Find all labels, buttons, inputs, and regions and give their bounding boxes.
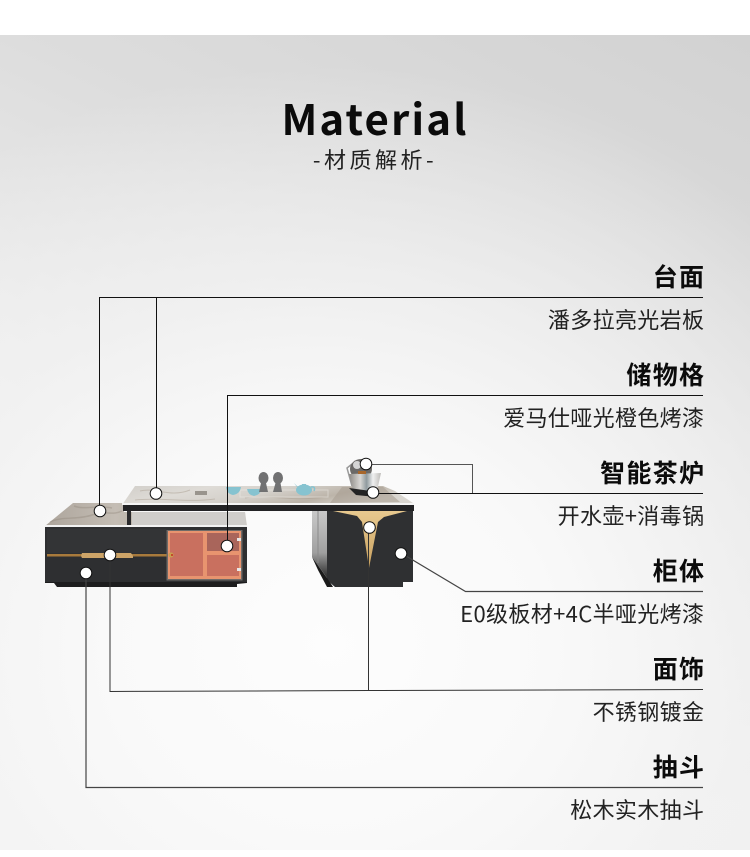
drawer gold strip	[47, 553, 167, 558]
marble veins and tray	[135, 490, 328, 500]
label: trim material: 不锈钢镀金	[593, 695, 704, 727]
label: drawer material: 松木实木抽斗	[570, 793, 704, 825]
marker dots	[80, 458, 407, 579]
label: cabinet material: E0级板材+4C半哑光烤漆	[460, 597, 704, 629]
leader lines: tabletop	[100, 297, 703, 511]
leader line: cabinet body	[401, 553, 703, 592]
label: storage heading: 储物格	[626, 356, 705, 392]
marble veins	[50, 506, 122, 522]
label: storage material: 爱马仕哑光橙色烤漆	[503, 401, 704, 433]
furniture: table top with tea set	[122, 459, 414, 525]
label: tabletop heading: 台面	[653, 258, 705, 294]
leader lines: trim	[110, 527, 703, 692]
label: tea stove heading: 智能茶炉	[600, 454, 705, 490]
label: trim heading: 面饰	[653, 650, 705, 686]
tea cups and pot	[226, 483, 315, 496]
subtitle: -材质解析-	[313, 143, 437, 175]
leader line: storage	[228, 396, 703, 546]
gold V inlay	[333, 511, 407, 568]
furniture: left cabinet	[45, 503, 247, 587]
label: drawer heading: 抽斗	[653, 748, 705, 784]
label: tea stove detail: 开水壶+消毒锅	[558, 499, 704, 531]
furniture: right cabinet	[312, 511, 413, 587]
leader lines: tea stove	[366, 464, 703, 494]
label: cabinet heading: 柜体	[653, 552, 705, 588]
orange glass storage	[166, 530, 242, 580]
label: tabletop material: 潘多拉亮光岩板	[548, 303, 704, 335]
title: Material	[281, 87, 469, 148]
kettle	[347, 459, 381, 497]
grey busts	[258, 472, 283, 492]
leader line: drawer	[86, 573, 703, 788]
